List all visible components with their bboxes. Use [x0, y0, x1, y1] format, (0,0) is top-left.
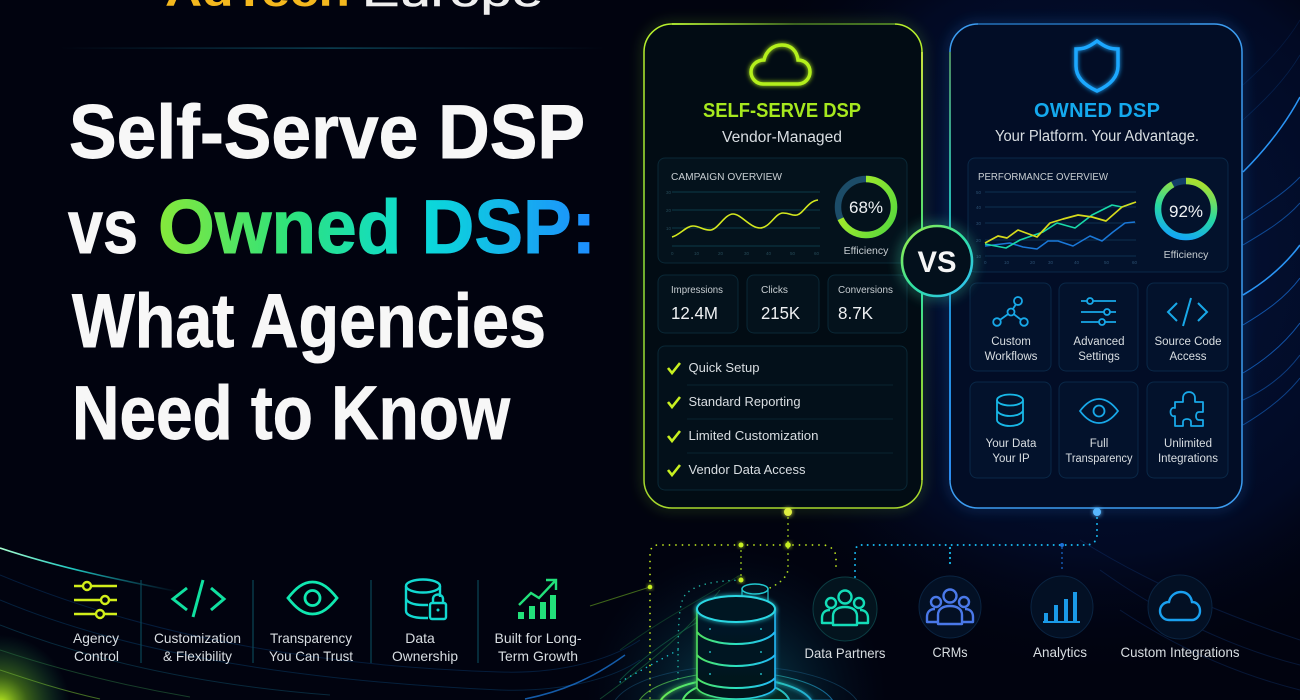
benefit: transparency: You Can Trust [269, 648, 353, 664]
heading: owned DSP: OWNED DSP [1034, 100, 1160, 122]
card: performance overview: PERFORMANCE OVERVIEW [978, 171, 1108, 183]
card: campaign overview: CAMPAIGN OVERVIEW [671, 171, 782, 183]
stat: conversions [828, 275, 907, 333]
tile: custom workflows: Workflows [985, 351, 1038, 363]
tile: custom workflows [970, 283, 1051, 371]
tile: your data your IP: Your IP [992, 453, 1030, 465]
panel: self-serve DSP [644, 24, 922, 508]
tile: advanced settings: Settings [1078, 351, 1120, 363]
benefit strip [73, 580, 582, 664]
stat: impressions [658, 275, 738, 333]
title: What Agencies [72, 279, 546, 364]
donut: 92% efficiency: Efficiency [1164, 249, 1209, 261]
benefit: transparency: Transparency [270, 630, 352, 646]
stat: clicks: Clicks [761, 284, 788, 296]
node: custom integrations [1120, 575, 1240, 660]
line chart: campaign: 10 [694, 251, 700, 256]
donut: 92% efficiency: 92% [1169, 202, 1203, 221]
tile: source code access: Source Code [1154, 336, 1222, 348]
stat: impressions: 12.4M [671, 303, 718, 323]
benefit: agency control: Control [74, 648, 119, 664]
tile: advanced settings [1059, 283, 1138, 371]
line chart: campaign: 40 [766, 251, 772, 256]
line chart: performance: 10 [976, 254, 982, 259]
benefit: data ownership: Ownership [392, 648, 458, 664]
donut: 68% efficiency: 68% [849, 198, 883, 217]
line chart: performance: 10 [1004, 260, 1010, 265]
stat: impressions: Impressions [671, 284, 723, 296]
line chart: campaign: 60 [814, 251, 820, 256]
node: data partners: Data Partners [804, 645, 886, 661]
line chart: performance: 20 [976, 238, 982, 243]
benefit: customization [154, 580, 241, 664]
panel: owned DSP [950, 24, 1242, 508]
line chart: campaign: 0 [671, 251, 674, 256]
title: Owned DSP: [158, 185, 596, 270]
node: data partners [804, 577, 886, 661]
checklist [658, 346, 907, 490]
subheading: your platform: Your Platform. Your Advantage. [995, 128, 1199, 145]
line chart: performance: 40 [1074, 260, 1080, 265]
node: custom integrations: Custom Integrations [1120, 644, 1240, 660]
stat: clicks: 215K [761, 303, 800, 323]
tile: unlimited integrations: Integrations [1158, 453, 1218, 465]
donut: 68% efficiency: Efficiency [844, 245, 889, 257]
badge: VS: VS [918, 246, 956, 279]
tile: source code access [1147, 283, 1228, 371]
line chart: performance: 40 [976, 205, 982, 210]
line chart: performance: 60 [1132, 260, 1138, 265]
benefit: long-term growth: Term Growth [498, 648, 578, 664]
logo: AdTech Europe [165, 0, 543, 15]
donut: 92% efficiency [1158, 181, 1214, 261]
line chart: performance: 0 [984, 260, 987, 265]
tile: unlimited integrations [1147, 382, 1228, 478]
title: vs [68, 185, 138, 270]
line chart: performance: 30 [1048, 260, 1054, 265]
card: campaign overview [658, 158, 907, 263]
benefit: data ownership [392, 580, 458, 664]
title: Need to Know [72, 371, 511, 456]
line chart: performance: 50 [976, 190, 982, 195]
benefit: transparency [269, 582, 353, 664]
line chart: performance: 50 [1104, 260, 1110, 265]
card: performance overview [968, 158, 1228, 272]
checklist: Limited Customization [688, 429, 819, 443]
icon: shield [1076, 41, 1118, 91]
benefit: long-term growth: Built for Long- [494, 630, 582, 646]
line chart: campaign: 30 [744, 251, 750, 256]
badge: VS [902, 226, 972, 296]
connectors: owned dotted lines [855, 508, 1101, 580]
line chart: performance: 20 [1030, 260, 1036, 265]
line chart: performance [976, 190, 1138, 265]
title: Self-Serve DSP [69, 90, 585, 175]
stat: clicks [747, 275, 819, 333]
tile: custom workflows: Custom [991, 336, 1031, 348]
line chart: campaign [666, 190, 820, 256]
tile: your data your IP [970, 382, 1051, 478]
benefit: long-term growth [494, 580, 582, 664]
line chart: campaign: 30 [666, 190, 672, 195]
platform rings [615, 666, 857, 700]
lower right arcs [1080, 540, 1300, 690]
donut: 68% efficiency [838, 179, 894, 257]
node: analytics: Analytics [1033, 644, 1087, 660]
node: CRMs: CRMs [932, 644, 968, 660]
tile: unlimited integrations: Unlimited [1164, 438, 1212, 450]
node: CRMs [919, 576, 981, 660]
tile: source code access: Access [1169, 351, 1207, 363]
tile: full transparency: Full [1090, 438, 1108, 450]
subheading: vendor-managed: Vendor-Managed [722, 129, 842, 146]
tile: your data your IP: Your Data [986, 438, 1037, 450]
line chart: campaign: 10 [666, 226, 672, 231]
benefit: data ownership: Data [405, 630, 435, 646]
benefit: agency control: Agency [73, 630, 119, 646]
checklist: Vendor Data Access [688, 463, 806, 477]
icon: cloud [751, 45, 810, 84]
connectors: self-serve dotted lines [620, 508, 836, 698]
tile: full transparency [1059, 382, 1138, 478]
benefit: customization: Customization [154, 630, 241, 646]
line chart: campaign: 20 [718, 251, 724, 256]
stat: conversions: 8.7K [838, 303, 873, 323]
checklist: Quick Setup [688, 361, 760, 375]
line chart: performance: 30 [976, 221, 982, 226]
line chart: campaign: 50 [790, 251, 796, 256]
tile: advanced settings: Advanced [1073, 336, 1125, 348]
right side curves [1243, 20, 1300, 425]
line chart: campaign: 20 [666, 208, 672, 213]
benefit: agency control [73, 582, 119, 664]
node: analytics [1031, 576, 1093, 660]
stat: conversions: Conversions [838, 284, 893, 296]
benefit: customization: & Flexibility [163, 648, 232, 664]
checklist: Standard Reporting [688, 395, 801, 409]
title [68, 90, 596, 456]
heading: self-serve DSP: SELF-SERVE DSP [703, 100, 861, 122]
database stack [615, 584, 857, 700]
tile: full transparency: Transparency [1066, 453, 1133, 465]
left bottom arcs [0, 548, 740, 699]
